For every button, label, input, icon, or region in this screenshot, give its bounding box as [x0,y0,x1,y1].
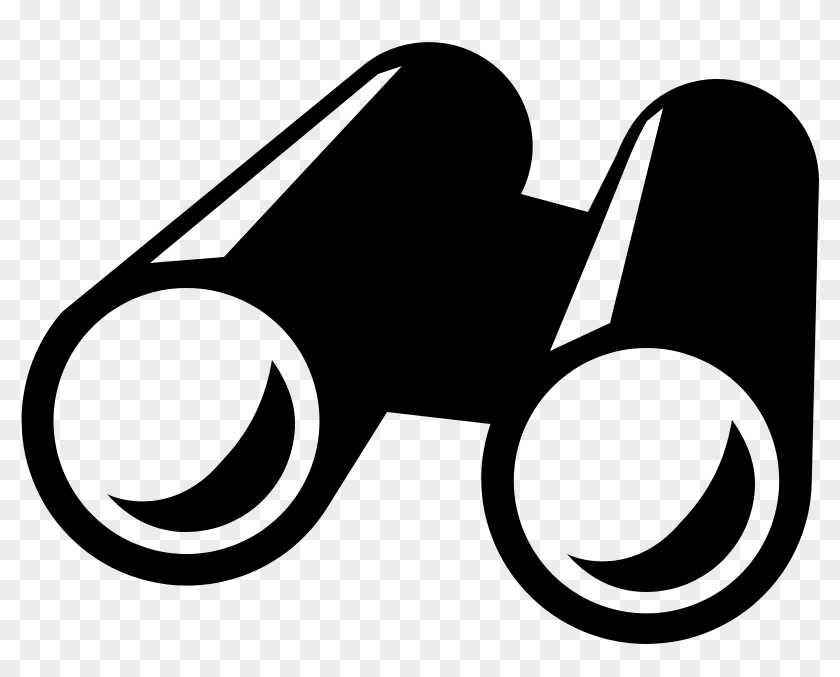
right lens crescent [567,420,755,592]
left lens crescent [107,360,295,532]
